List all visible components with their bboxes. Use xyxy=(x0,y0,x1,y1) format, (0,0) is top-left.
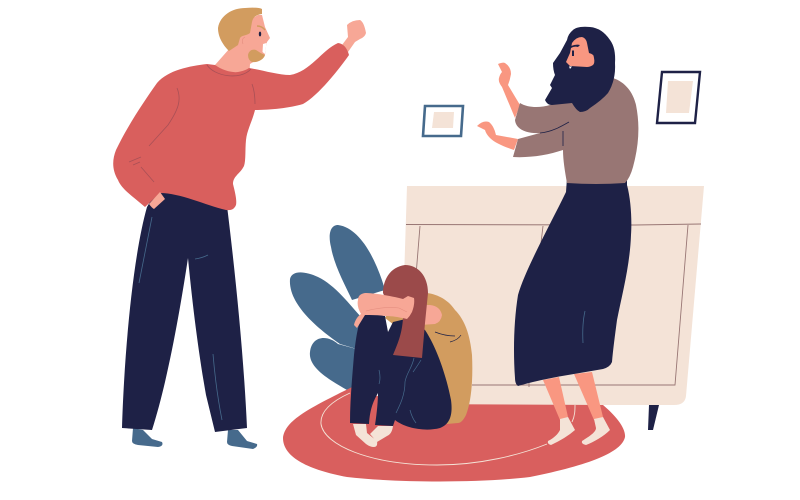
woman hair xyxy=(545,27,615,112)
cabinet xyxy=(400,186,704,430)
picture frame: small blue xyxy=(423,106,463,136)
woman tooth xyxy=(569,66,572,69)
woman top xyxy=(513,78,638,184)
girl arms xyxy=(354,293,414,328)
picture frame: large navy xyxy=(657,72,700,123)
girl sweater back xyxy=(385,293,472,424)
man eye xyxy=(259,32,261,36)
man sweater xyxy=(113,43,349,210)
woman raised arm xyxy=(498,63,520,118)
woman eye xyxy=(571,45,580,56)
woman standing xyxy=(477,27,638,445)
cabinet leg xyxy=(648,405,659,430)
man trousers xyxy=(122,188,247,432)
man hand in pocket xyxy=(149,192,165,209)
rug xyxy=(283,387,625,482)
woman lower arm xyxy=(477,122,518,150)
girl trousers xyxy=(350,312,452,430)
seated girl xyxy=(350,265,472,447)
man sweater creases xyxy=(129,65,255,182)
man mouth xyxy=(262,43,266,54)
man hair xyxy=(218,8,262,51)
cabinet body xyxy=(400,186,704,405)
man xyxy=(113,8,366,449)
woman socks xyxy=(548,417,610,445)
girl shoulder xyxy=(420,305,442,325)
man neck and face xyxy=(215,15,270,80)
girl hair xyxy=(383,265,428,358)
woman legs xyxy=(543,372,603,420)
plant leaves xyxy=(290,225,385,392)
girl socks xyxy=(353,424,393,447)
woman face xyxy=(566,37,594,67)
woman skirt xyxy=(514,178,631,386)
man beard xyxy=(248,50,265,62)
man socks xyxy=(132,428,257,449)
man fist xyxy=(342,20,366,52)
